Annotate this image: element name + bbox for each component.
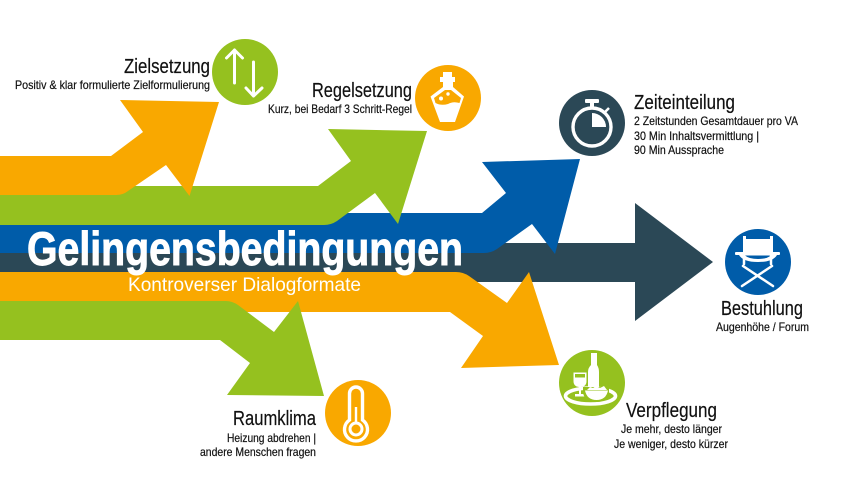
arrow: orange Zielsetzung <box>0 100 219 196</box>
text: Regelsetzung: Kurz, bei Bedarf 3 Schritt-Regel <box>268 102 412 116</box>
text: Regelsetzung <box>268 80 412 116</box>
text: Zeiteinteilung: Zeiteinteilung <box>634 92 735 114</box>
text: Verpflegung: Je weniger, desto kürzer <box>614 437 728 451</box>
subtitle: Kontroverser Dialogformate <box>128 274 361 296</box>
icon: flask <box>415 65 481 131</box>
text: Zielsetzung <box>15 56 210 92</box>
text: Zielsetzung: Zielsetzung <box>124 56 210 78</box>
arrow: green Regelsetzung <box>0 129 427 225</box>
icon: director chair <box>725 229 791 295</box>
text: Raumklima <box>200 408 317 459</box>
arrow: dark Bestuhlung <box>0 203 713 321</box>
text: Bestuhlung: Bestuhlung <box>721 298 803 320</box>
text: Zeiteinteilung: 2 Zeitstunden Gesamtdauer pro VA <box>634 114 798 128</box>
text: Zeiteinteilung <box>634 92 798 157</box>
text: Verpflegung: Je mehr, desto länger <box>621 422 722 436</box>
title: Gelingensbedingungen <box>27 222 463 275</box>
arrow: blue Zeiteinteilung <box>0 159 580 254</box>
arrow: orange Verpflegung <box>0 272 559 368</box>
text: Zeiteinteilung: 90 Min Aussprache <box>634 143 724 157</box>
text: Verpflegung: Verpflegung <box>626 400 717 422</box>
text: Raumklima: Heizung abdrehen | <box>227 431 316 445</box>
icon: up and down arrows <box>212 39 278 105</box>
text: Zielsetzung: Positiv & klar formulierte Zielformulierung <box>15 78 210 92</box>
icon: wine and food <box>559 350 625 416</box>
text: Bestuhlung <box>716 298 809 334</box>
text: Regelsetzung: Regelsetzung <box>312 80 412 102</box>
arrow: green Raumklima <box>0 301 324 396</box>
text: Bestuhlung: Augenhöhe / Forum <box>716 320 809 334</box>
text: Raumklima: andere Menschen fragen <box>200 445 316 459</box>
text: Raumklima: Raumklima <box>233 408 317 430</box>
icon: thermometer <box>325 380 391 446</box>
icon: stopwatch <box>559 90 625 156</box>
text: Verpflegung <box>614 400 728 451</box>
text: Zeiteinteilung: 30 Min Inhaltsvermittlung | <box>634 129 759 143</box>
